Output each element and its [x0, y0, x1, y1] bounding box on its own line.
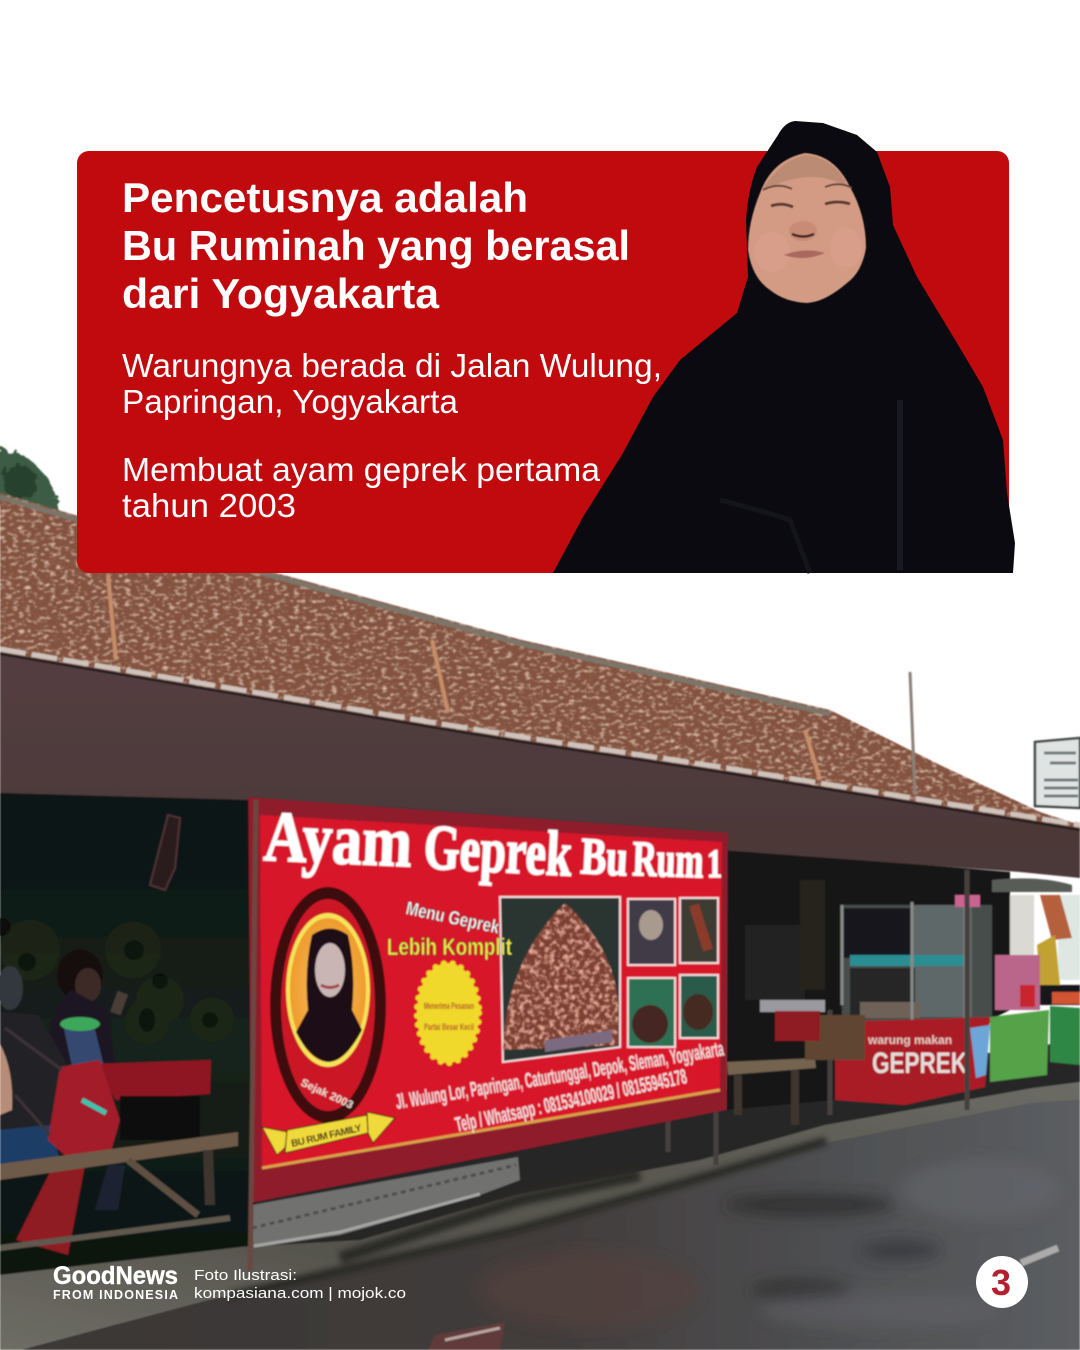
interior right [726, 848, 1010, 1110]
heading: dari Yogyakarta [122, 270, 440, 317]
antenna pole [910, 672, 915, 795]
text block: warung location [122, 347, 662, 420]
text block: warung location: Papringan, Yogyakarta [122, 383, 459, 420]
green counters [990, 1006, 1080, 1082]
logo: GoodNews from Indonesia: GoodNews [53, 1262, 178, 1290]
tiled roof [0, 493, 1080, 840]
red counter with Geprek sign: GEPREK [872, 1047, 967, 1080]
banner address: Telp / Whatsapp : 081534100029 / 08155945178 [453, 1065, 689, 1137]
brown awning [0, 652, 1080, 878]
banner portrait medallion: Sejak 2003 [299, 1077, 355, 1112]
photo credit: kompasiana.com | mojok.co [194, 1285, 406, 1302]
banner title: Ayam [262, 796, 414, 882]
customers and table [0, 949, 211, 1255]
wet edge of the pavement [230, 1141, 826, 1296]
background photo: warung street scene [0, 449, 1080, 1350]
wet road [20, 1100, 1080, 1350]
text block: first year: Membuat ayam geprek pertama [122, 451, 601, 488]
logo: GoodNews from Indonesia: FROM INDONESIA [53, 1288, 178, 1302]
banner ribbon [262, 1112, 395, 1155]
banner portrait medallion [270, 887, 386, 1123]
red counter with Geprek sign: warung makan [867, 1033, 952, 1047]
banner title: Geprek [422, 811, 574, 890]
text block: first year: tahun 2003 [122, 487, 296, 524]
banner tagline: Lebih Komplit [387, 934, 512, 961]
road reflections [480, 1160, 1060, 1328]
metal grate under banner [252, 1157, 520, 1248]
panel: red info card [77, 151, 1009, 573]
interior left: sunflower mural [0, 785, 255, 1278]
banner yellow seal: Partai Besar Kecil [424, 1022, 474, 1032]
background photo: warung street scene: Jl. Wulung Lor, Papringan, Caturtunggal, Depok, Sleman, Yogyakarta [394, 1038, 726, 1114]
red counter with Geprek sign [835, 1017, 990, 1105]
heading [122, 174, 630, 317]
banner title: 1 [707, 841, 722, 886]
red shop banner [248, 796, 728, 1270]
wooden bench and rail [0, 1132, 238, 1248]
banner ribbon: BU RUM FAMILY [290, 1123, 363, 1150]
heading: Bu Ruminah yang berasal [122, 222, 630, 269]
page number badge [976, 1256, 1028, 1308]
white wall and hanging goods [992, 878, 1080, 1005]
banner tagline: Menu Geprek [404, 898, 502, 939]
face [748, 153, 866, 303]
banner address [394, 1038, 726, 1137]
banner tagline [387, 898, 512, 961]
dark floor [0, 1040, 1080, 1300]
banner yellow seal: Menerima Pesanan [424, 1001, 474, 1011]
glass display case [842, 895, 1040, 1023]
tree behind roof [0, 449, 60, 512]
portrait: Bu Ruminah in black hijab [553, 121, 1015, 573]
text block: warung location: Warungnya berada di Jalan Wulung, [122, 347, 662, 384]
banner yellow seal [417, 963, 479, 1063]
banner title: Bu [579, 828, 629, 887]
street sign top right [1035, 738, 1080, 808]
banner title [262, 796, 722, 890]
heading: Pencetusnya adalah [122, 174, 528, 221]
pavement [0, 1082, 1080, 1350]
banner food photos [500, 897, 718, 1062]
photo credit: Foto Ilustrasi: [194, 1267, 297, 1284]
bench and poles right [668, 870, 967, 1165]
photo credit [194, 1267, 406, 1302]
logo: GoodNews from Indonesia [53, 1262, 178, 1302]
page number badge: 3 [991, 1262, 1011, 1303]
banner title: Rum [632, 830, 705, 888]
text block: first year [122, 451, 601, 524]
